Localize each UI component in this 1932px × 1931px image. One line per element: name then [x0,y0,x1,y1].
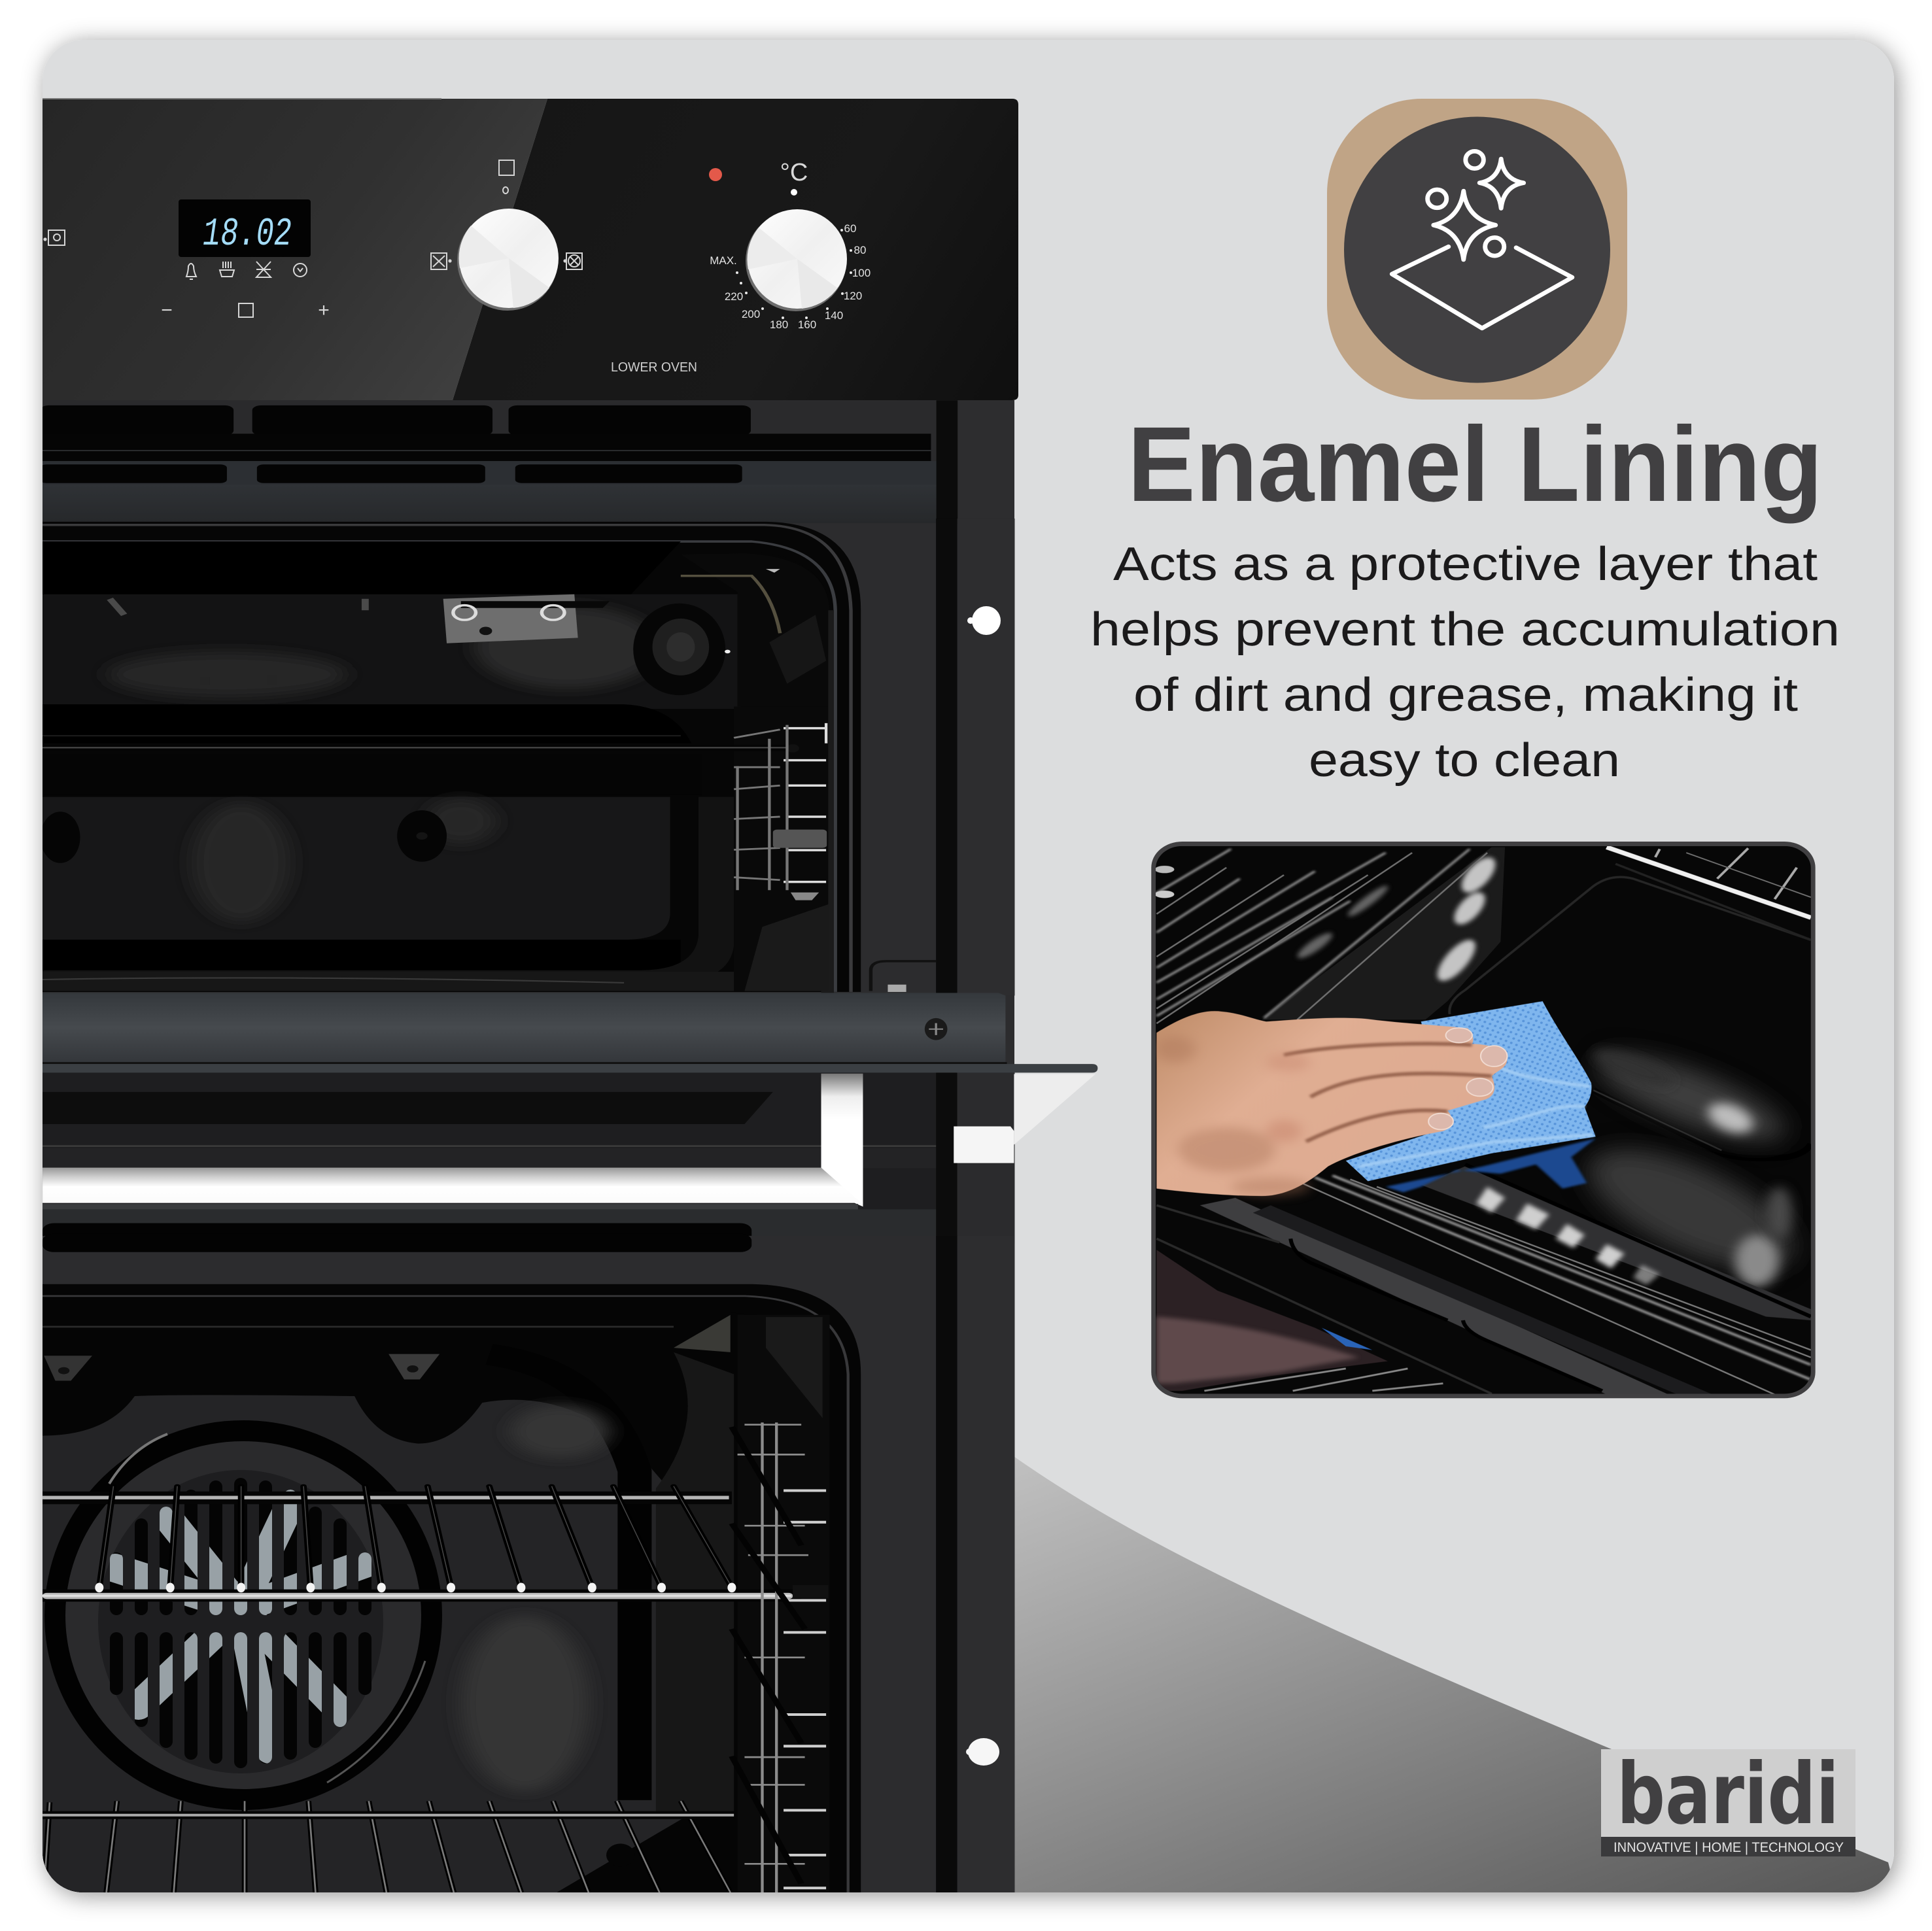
side wall [734,707,830,991]
right frame mounting hole top [967,606,1001,635]
fan grille cover [98,1470,383,1773]
temperature scale: 140 [825,309,843,322]
control panel [43,98,1018,400]
temperature scale: MAX. [710,254,737,267]
gradient curved corner shape [1007,1452,1897,1896]
tan rounded square [1327,99,1627,400]
badge icon [1327,99,1627,400]
rails upper left [1156,849,1470,1018]
tagline strip [1601,1837,1855,1856]
pan lower [43,754,702,795]
main rod [43,1590,801,1601]
bracket [871,961,936,991]
temperature scale: 180 [770,318,788,331]
lower edge rail with reflections [1421,1167,1811,1320]
hand [1156,1011,1507,1196]
touch control minus: − [161,299,173,321]
temperature scale: 100 [852,267,871,279]
lower reflection of hand [1156,1250,1388,1391]
fan ring [55,1431,432,1800]
description text: easy to clean [1309,734,1620,787]
oven photo illustration [40,400,1097,1898]
icon: lamp symbol [44,230,65,245]
temperature scale [710,222,871,331]
slot [43,1223,751,1244]
lower rack [44,1801,731,1892]
rod dots [95,1582,736,1592]
strip [43,993,1005,1062]
top wire [43,1492,732,1504]
white notch [954,1126,1014,1163]
white reflection triangle [1014,1074,1095,1145]
cloth [1346,1001,1596,1181]
function knob [457,209,559,311]
shelf rod [43,745,794,751]
icon: sparkling surface [1392,151,1572,328]
dark circle [1344,116,1610,383]
door frame edge [821,610,831,992]
shelf strip and door with handle [43,993,1097,1244]
lower oven cavity [43,1234,1014,1894]
touch control oven [239,303,253,317]
side wall sheen [1262,847,1505,1019]
baking pan outline [1449,877,1811,1014]
bottom left rack reflection [1204,1369,1443,1391]
lower oven racks [43,1315,830,1894]
touch control plus: + [318,299,330,321]
inset photo: hand wiping oven [1151,842,1816,1398]
fan blades seen through slots [98,1471,386,1779]
lower oven label: LOWER OVEN [611,360,697,375]
vents section [40,400,1014,524]
logo [1601,1745,1855,1856]
tagline: INNOVATIVE | HOME | TECHNOLOGY [1613,1840,1844,1855]
temperature scale: 120 [844,290,862,302]
digital display [179,199,311,257]
temperature scale dots [736,229,852,319]
ledge [43,1062,1007,1064]
title: Enamel Lining [1128,404,1823,524]
right frame mounting hole bottom [966,1738,999,1766]
top right rack [1607,847,1811,917]
function knob symbols [431,160,582,269]
door rails [1200,1198,1668,1395]
upper oven cavity [41,519,1014,996]
indicator light [709,168,722,181]
side wall [738,1315,830,1894]
pan top bar [43,704,650,709]
side supports [784,1490,826,1888]
description text: Acts as a protective layer that [1113,538,1818,590]
screw [925,1018,947,1040]
door dark panel [43,1092,773,1124]
temperature knob [746,209,847,311]
glass reflection left [43,99,547,400]
temperature scale: 200 [742,308,760,320]
back wall [43,1395,691,1894]
temperature scale: 220 [725,290,743,303]
pan floor sheen [1585,1038,1796,1157]
fingernails [1428,1028,1507,1129]
oven body base [43,400,1014,1898]
brackets [44,1356,92,1381]
steel handle [43,1074,863,1206]
fan assembly [55,1431,432,1800]
radial wires [99,1486,732,1587]
shelf supports [784,723,826,882]
description text [1090,538,1840,787]
clock digits: 18.02 [203,213,292,257]
logo tile [1601,1749,1855,1837]
degrees symbol: °C [780,159,808,186]
icons under display [186,262,307,279]
temperature scale: 60 [844,222,856,235]
brand name: baridi [1617,1745,1839,1843]
temperature zero dot [791,189,797,196]
lamp [633,604,725,695]
description text: of dirt and grease, making it [1133,669,1798,721]
temperature scale: 80 [854,244,866,256]
cloth reflection [1386,1138,1596,1192]
description text: helps prevent the accumulation [1090,604,1840,656]
glass right [453,99,1018,400]
temperature scale: 160 [798,318,816,331]
back wall upper [43,594,741,709]
fixture plate [443,594,610,643]
